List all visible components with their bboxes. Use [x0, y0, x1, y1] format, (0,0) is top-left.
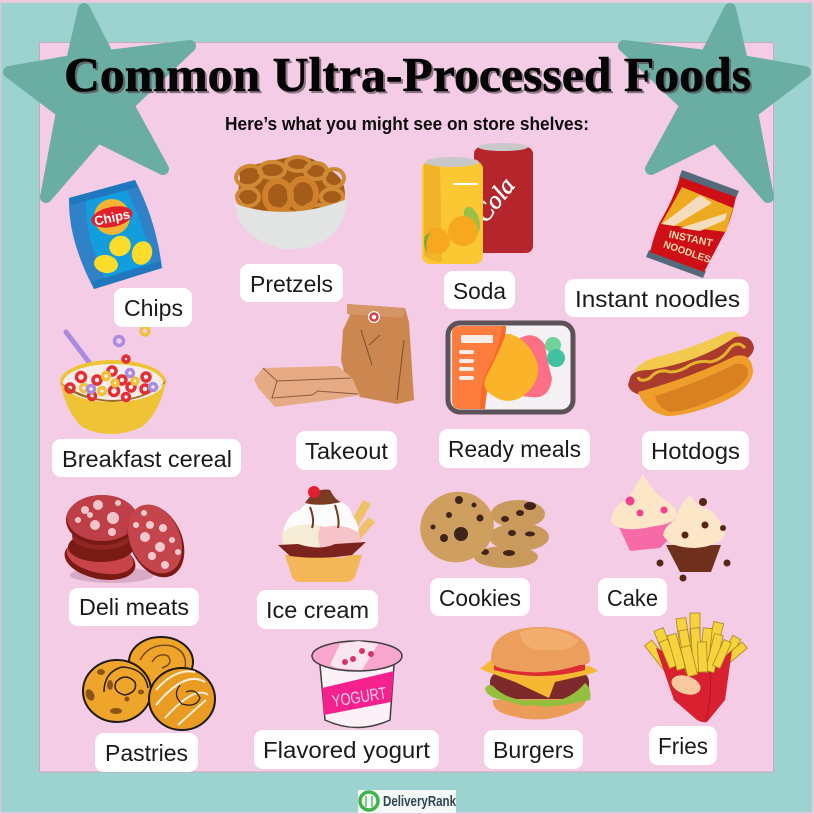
food: pastries — [83, 637, 215, 730]
food: pretzels — [234, 156, 347, 249]
label: Deli meats: Deli meats — [79, 594, 189, 620]
label: Breakfast cereal — [52, 439, 241, 477]
label: Soda: Soda — [453, 278, 506, 304]
subtitle: Here’s what you might see on store shelves: — [225, 114, 589, 134]
food: cookies — [410, 481, 549, 573]
food: instant noodles: NOODLES — [662, 239, 712, 266]
star: right — [624, 9, 805, 197]
food: instant noodles: INSTANT — [668, 229, 714, 250]
label: Flavored yogurt: Flavored yogurt — [263, 737, 431, 763]
label: Burgers — [484, 730, 583, 769]
label: Instant noodles — [565, 279, 749, 317]
label: Ice cream: Ice cream — [266, 597, 369, 623]
label: Cake — [598, 578, 667, 616]
star: left — [9, 9, 190, 197]
label: Breakfast cereal: Breakfast cereal — [62, 446, 232, 472]
title: Common Ultra-Processed Foods — [66, 49, 753, 104]
food: flavored yogurt: YOGURT — [331, 684, 388, 711]
label: Ready meals: Ready meals — [448, 436, 581, 462]
food: soda cans: Cola — [469, 173, 521, 228]
food: chips — [69, 180, 162, 289]
label: Ice cream — [257, 590, 378, 629]
label: Hotdogs: Hotdogs — [651, 438, 740, 464]
food: flavored yogurt — [312, 641, 402, 728]
food: instant noodles — [646, 170, 739, 278]
food: fries — [645, 613, 747, 722]
label: Ready meals — [439, 429, 590, 468]
food: cake — [611, 474, 730, 582]
label: Cookies: Cookies — [439, 585, 521, 611]
label: Fries — [649, 726, 717, 765]
food: takeout bag and box — [254, 304, 414, 407]
label: Instant noodles: Instant noodles — [575, 286, 740, 312]
label: Takeout: Takeout — [305, 438, 389, 464]
label: Hotdogs — [642, 431, 749, 470]
food: hotdog — [628, 331, 754, 416]
logo: DeliveryRank: DeliveryRank — [383, 793, 456, 810]
label: Cookies — [430, 578, 530, 616]
label: Pastries: Pastries — [105, 740, 188, 766]
label: Chips — [114, 288, 192, 327]
label: Pastries — [95, 733, 198, 772]
food: burger — [480, 627, 598, 720]
label: Burgers: Burgers — [493, 737, 574, 763]
food: deli meats — [61, 495, 195, 586]
label: Takeout — [296, 431, 397, 470]
label: Chips: Chips — [124, 295, 183, 321]
food: ice cream — [278, 486, 375, 582]
food: breakfast cereal — [60, 327, 166, 434]
label: Deli meats — [69, 588, 199, 626]
label: Cake: Cake — [607, 585, 658, 611]
food: ready meal — [448, 323, 573, 412]
label: Pretzels: Pretzels — [250, 271, 333, 297]
label: Soda — [444, 271, 515, 309]
food: soda cans — [422, 143, 533, 264]
label: Pretzels — [240, 264, 343, 302]
title: Common Ultra-Processed Foods — [64, 47, 751, 102]
label: Flavored yogurt — [254, 730, 439, 769]
label: Fries: Fries — [658, 733, 708, 759]
food: chips: Chips — [93, 206, 131, 229]
logo: DeliveryRank — [358, 790, 456, 813]
